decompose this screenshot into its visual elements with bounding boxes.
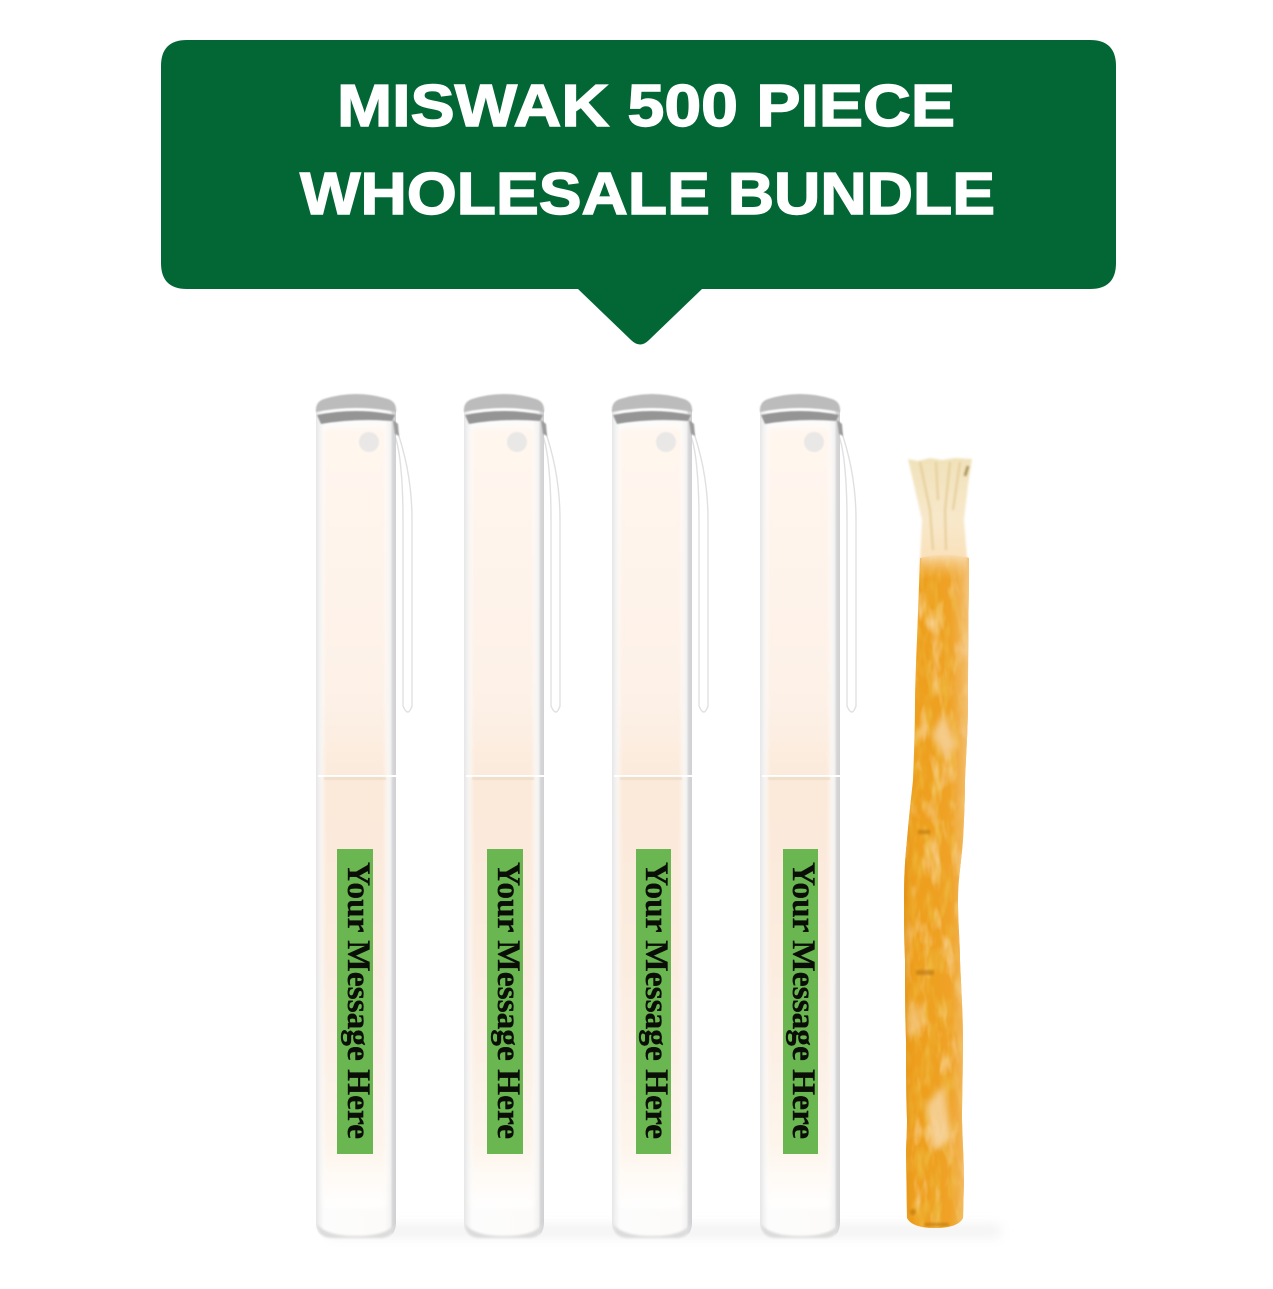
tube seam	[466, 775, 544, 777]
tube 4	[760, 394, 856, 1238]
tube 1	[316, 394, 412, 1238]
cap	[316, 394, 399, 436]
cap hole	[507, 432, 527, 452]
banner background with pointer	[161, 40, 1116, 344]
label: Your Message Here	[785, 862, 821, 1139]
tube 3	[612, 394, 708, 1238]
inner stick	[471, 428, 534, 1208]
label: Your Message Here	[490, 862, 526, 1139]
inner stick	[323, 428, 386, 1208]
frayed bristles	[908, 458, 972, 582]
tube body	[760, 410, 840, 1238]
clip	[543, 424, 560, 712]
title text: MISWAK 500 PIECE	[337, 73, 955, 139]
title text: WHOLESALE BUNDLE	[300, 161, 995, 227]
cap hole	[804, 432, 824, 452]
cap	[760, 394, 843, 436]
clip	[839, 424, 856, 712]
tube seam	[318, 775, 396, 777]
label: Your Message Here	[638, 862, 674, 1139]
tube seam	[762, 775, 840, 777]
infographic canvas	[161, 40, 1116, 1240]
tube base	[465, 1222, 543, 1238]
dark bark specks	[910, 830, 949, 1226]
title text	[300, 73, 995, 227]
tube body	[316, 410, 396, 1238]
cap hole	[359, 432, 379, 452]
label: Your Message Here	[340, 862, 376, 1139]
tube 2	[464, 394, 560, 1238]
cap	[612, 394, 695, 436]
tube base	[613, 1222, 691, 1238]
miswak stick	[904, 457, 973, 1228]
title callout banner	[161, 40, 1116, 344]
clip	[691, 424, 708, 712]
tube base	[317, 1222, 395, 1238]
inner stick	[767, 428, 830, 1208]
tube body	[612, 410, 692, 1238]
inner stick	[619, 428, 682, 1208]
cap	[464, 394, 547, 436]
light bark patches	[908, 712, 956, 1150]
tube seam	[614, 775, 692, 777]
tube body	[464, 410, 544, 1238]
floor shadow	[330, 1226, 1000, 1236]
tube base	[761, 1222, 839, 1238]
cap hole	[656, 432, 676, 452]
clip	[395, 424, 412, 712]
wooden body	[904, 555, 969, 1228]
